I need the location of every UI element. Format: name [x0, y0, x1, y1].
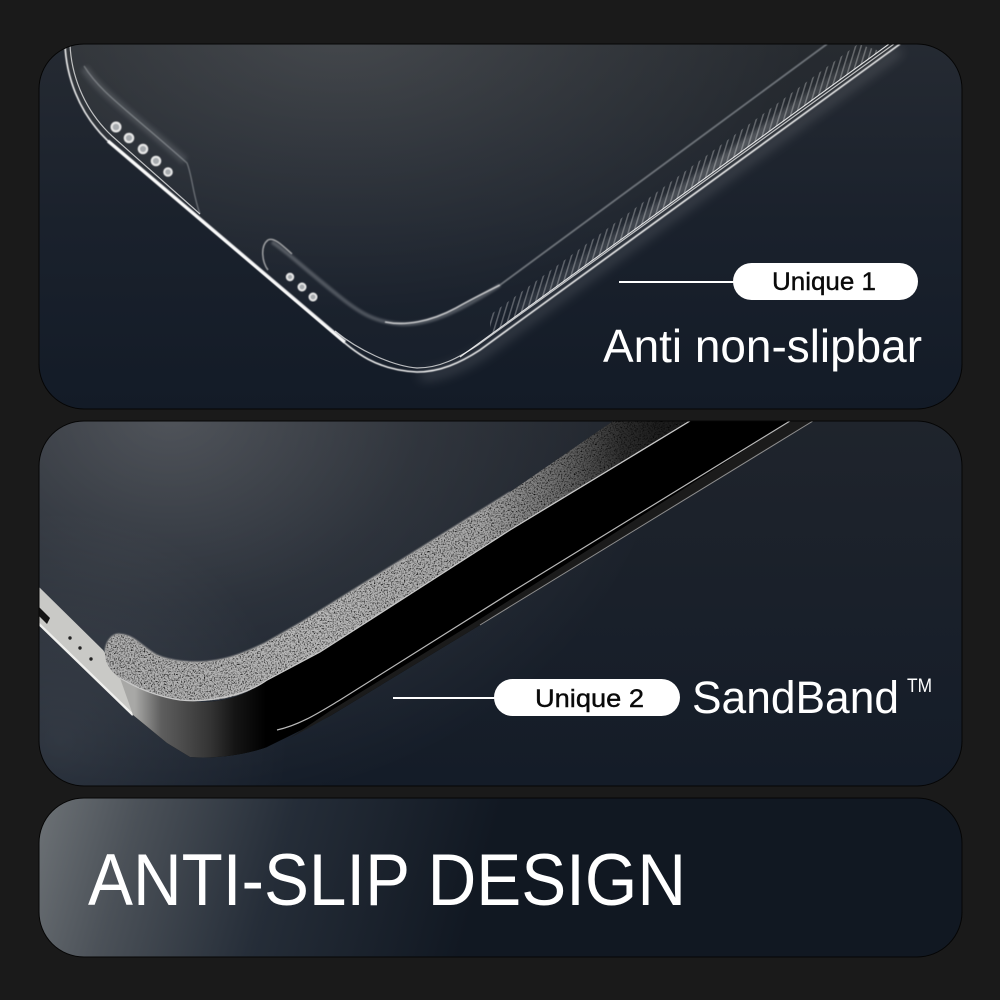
case interior shading	[65, 44, 900, 372]
interior top glow	[66, 44, 669, 229]
button cutouts small group	[287, 274, 316, 300]
callout line 1	[619, 281, 735, 283]
silver phone side	[40, 588, 132, 713]
black case body	[128, 421, 813, 758]
panel 1 background	[39, 44, 962, 409]
outer edge second line	[70, 44, 894, 368]
bold lower side edge	[108, 141, 345, 342]
inner rim highlight	[385, 285, 500, 323]
lower outer band	[290, 421, 813, 738]
sandband upper edge soft line	[105, 492, 510, 662]
black case with sandband illustration	[39, 421, 813, 758]
pill label 2: Unique 2	[535, 685, 644, 713]
sandband texture	[105, 421, 690, 701]
trademark: TM	[907, 676, 932, 697]
panel 2 background	[39, 421, 962, 786]
pill: unique 1	[733, 263, 918, 300]
outer edge main line	[65, 44, 900, 372]
anti-slip hatching	[490, 44, 880, 335]
panel 2 top glow	[39, 421, 962, 786]
button cutouts large group	[112, 123, 172, 176]
sandband lower edge line	[120, 421, 690, 701]
panel 2 lower left glow	[39, 421, 962, 786]
inner rim soft band	[272, 242, 500, 324]
callout line 2	[393, 697, 496, 699]
panel 2 border	[39, 421, 962, 786]
outer faint line	[480, 421, 813, 625]
lower glossy line	[277, 421, 790, 730]
clear case illustration	[65, 44, 900, 376]
panel: title banner	[39, 798, 962, 957]
hatching highlight	[516, 48, 878, 315]
case left reflection	[120, 678, 267, 758]
silver edge highlight	[39, 624, 133, 715]
speaker port	[39, 607, 50, 624]
inner rim line	[500, 44, 827, 285]
panel 1 border	[39, 44, 962, 409]
feature name 1: Anti non-slipbar	[603, 320, 922, 372]
pill label 1: Unique 1	[772, 268, 876, 296]
top-left notch soft band	[84, 68, 185, 161]
top-left notch rim	[84, 66, 200, 214]
banner background	[39, 798, 962, 957]
panel: unique 1 anti non-slipbar	[39, 44, 962, 409]
glow along edge	[420, 50, 900, 376]
title: ANTI-SLIP DESIGN	[88, 840, 686, 921]
feature name 2: SandBand	[692, 672, 899, 723]
small notch rim	[263, 239, 292, 270]
panel: unique 2 sandband	[39, 421, 962, 786]
speaker holes	[68, 636, 93, 661]
right side triple lines	[460, 44, 889, 357]
pill: unique 2	[494, 679, 680, 716]
